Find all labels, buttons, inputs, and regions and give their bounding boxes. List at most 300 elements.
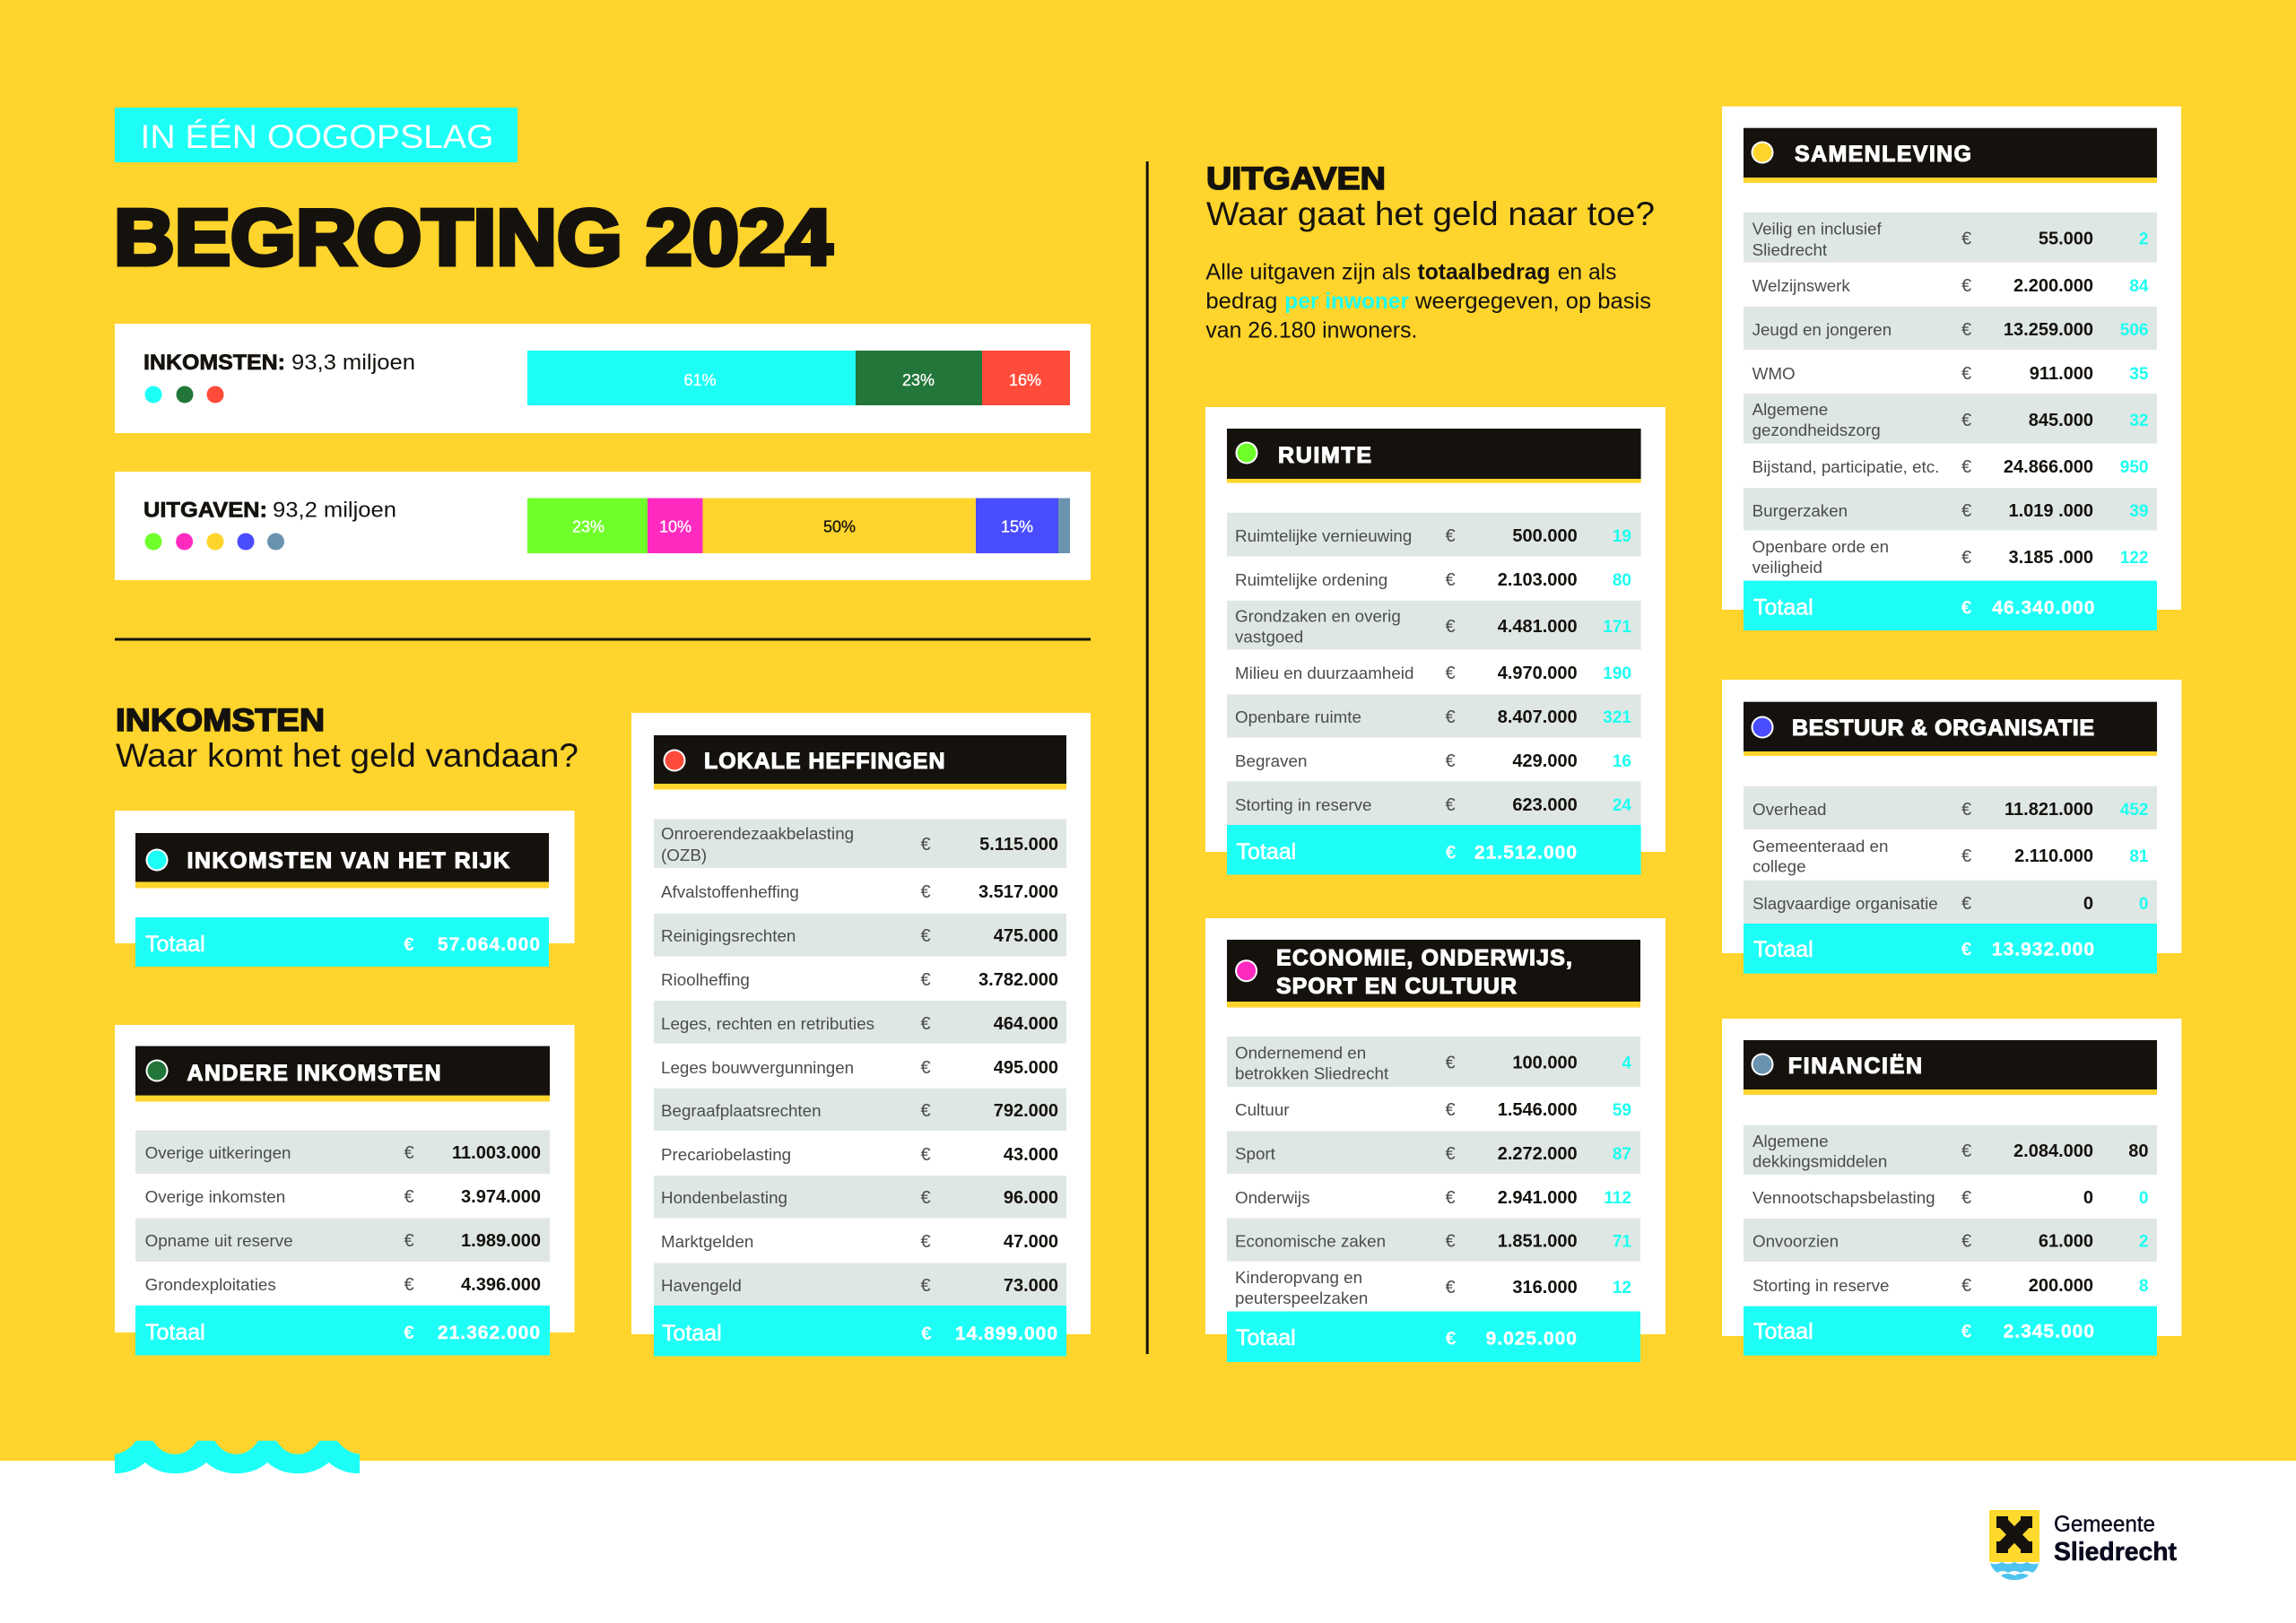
row: ondernemend: € [1445,1053,1456,1072]
row: openbare ruimte: € [1445,707,1456,727]
row: overhead: € [1961,800,1971,820]
row: overige inkomsten: € [404,1187,414,1207]
stacked bar: uitgaven: 50% [823,518,856,536]
stacked bar: inkomsten: 16% [1009,371,1041,389]
row: bijstand: 950 [2120,458,2149,477]
total row [135,1306,550,1356]
row: openbare ruimte: Openbare ruimte [1235,707,1361,726]
panel: financien [1722,1019,2181,1356]
row: onderwijs: 2.941.000 [1498,1188,1578,1208]
row: veilig en inclusief: 55.000 [2039,230,2093,249]
row: sport: Sport [1235,1144,1276,1163]
row: begraafplaatsrechten: Begraafplaatsrechten [661,1101,822,1120]
row: hondenbelasting: 96.000 [1004,1188,1058,1208]
row: onvoorzien: € [1961,1232,1971,1252]
row: vennootschapsbelasting: Vennootschapsbelasting [1752,1188,1935,1207]
row: jeugd en jongeren [1744,307,2157,350]
row: milieu: € [1445,664,1456,683]
row: veilig en inclusief [1744,213,2157,263]
row: economische zaken: Economische zaken [1235,1232,1386,1250]
row: ruimtelijke ordening: 80 [1613,571,1631,590]
row: kinderopvang: € [1445,1278,1456,1298]
total row: € [921,1324,932,1344]
row: slagvaardige organisatie [1744,881,2157,924]
row: welzijnswerk: € [1961,276,1971,296]
row: leges rechten: Leges, rechten en retributies [661,1014,874,1033]
row: rioolheffing: 3.782.000 [978,970,1058,990]
row: hondenbelasting: € [920,1188,931,1208]
total row: Totaal [1753,937,1813,962]
row: kinderopvang [1235,1268,1631,1307]
row: economische zaken: € [1445,1232,1456,1252]
row: gemeenteraad: 2.110.000 [2014,846,2093,866]
panel: samenleving [1722,107,2181,630]
total row: Totaal [1753,595,1813,621]
row: ozb [654,820,1066,868]
logo wordmark: Sliedrecht [2054,1538,2177,1567]
row: slagvaardige organisatie: 0 [2083,894,2093,914]
row: onderwijs [1235,1188,1631,1208]
total row: 9.025.000 [1486,1329,1578,1349]
stacked bar: uitgaven [527,499,1070,553]
row: ondernemend: Ondernemend en [1235,1044,1366,1062]
intro paragraph: per inwoner [1284,289,1409,314]
row: leges bouwvergunningen [661,1058,1058,1078]
row: marktgelden: 47.000 [1004,1232,1058,1252]
total row [1227,1311,1640,1362]
total row: € [1446,843,1457,864]
row: leges bouwvergunningen: 495.000 [994,1058,1058,1078]
row: wmo: 35 [2129,365,2149,384]
row: onvoorzien: 2 [2139,1233,2149,1252]
row: onderwijs: 112 [1604,1189,1631,1208]
total row [1227,825,1641,875]
row: algemene dekkingsmiddelen: € [1961,1141,1971,1161]
row: openbare orde [1752,537,2149,577]
row: precariobelasting: 43.000 [1004,1145,1058,1165]
row: milieu [1235,664,1631,683]
intro paragraph: van 26.180 inwoners. [1205,317,1417,343]
row: overige inkomsten: Overige inkomsten [145,1187,285,1206]
total row [1744,1306,2157,1356]
total row: Totaal [662,1321,722,1346]
total row: Totaal [1236,839,1296,864]
row: grondexploitaties: Grondexploitaties [145,1275,276,1294]
row: cultuur [1235,1100,1631,1120]
row: havengeld: € [920,1276,931,1296]
row: algemene dekkingsmiddelen: 80 [2128,1141,2149,1161]
row: leges rechten [654,1001,1066,1044]
row: storting in reserve: Storting in reserve [1235,795,1371,814]
row: veilig en inclusief: € [1961,230,1971,249]
row: bijstand: 24.866.000 [2004,457,2093,477]
row: slagvaardige organisatie: Slagvaardige organisatie [1752,894,1938,913]
row: openbare orde: veiligheid [1752,558,1822,577]
row: ozb: (OZB) [661,846,707,864]
row: sport [1227,1131,1640,1174]
row: cultuur: Cultuur [1235,1100,1290,1119]
row: algemene gezondheidszorg: Algemene [1752,400,1828,419]
row: reinigingsrechten: € [920,926,931,946]
row: veilig en inclusief: 2 [2139,230,2149,249]
row: vennootschapsbelasting [1752,1188,2149,1208]
intro paragraph: totaalbedrag [1417,260,1550,285]
row: openbare orde: 3.185 .000 [2008,548,2093,568]
total row: Totaal [1753,1319,1813,1344]
panel: uitgaven summary [115,472,1091,580]
total row [1744,924,2157,974]
row: economische zaken: 71 [1613,1232,1631,1252]
row: storting in reserve: 24 [1613,796,1631,815]
row: kinderopvang: 12 [1613,1279,1631,1298]
row: grondzaken: vastgoed [1235,628,1303,646]
row: algemene gezondheidszorg: 845.000 [2029,411,2093,430]
row: begraven [1235,751,1631,771]
row: veilig en inclusief: Veilig en inclusief [1752,219,1882,238]
row: openbare ruimte: 8.407.000 [1498,707,1578,727]
summary label: inkomsten [144,351,415,375]
row: onvoorzien [1744,1219,2157,1262]
row: overhead: 452 [2120,801,2149,820]
stacked bar: uitgaven: 15% [1001,518,1033,536]
row: burgerzaken: 1.019 .000 [2008,501,2093,521]
row: ozb: € [920,835,931,855]
row: leges rechten: 464.000 [994,1014,1058,1034]
total row: € [404,1323,414,1343]
row: cultuur: € [1445,1100,1456,1120]
row: jeugd en jongeren: 13.259.000 [2004,320,2093,340]
row: kinderopvang: peuterspeelzaken [1235,1289,1368,1307]
heading: inkomsten: INKOMSTEN [116,703,325,738]
row: begraafplaatsrechten: € [920,1101,931,1121]
row: ozb: 5.115.000 [979,835,1058,855]
header: inkomsten van het rijk [135,833,549,888]
row: hondenbelasting: Hondenbelasting [661,1188,787,1207]
row: storting in reserve [1752,1276,2149,1296]
row: veilig en inclusief: Sliedrecht [1752,240,1828,259]
row: grondzaken: € [1445,617,1456,637]
row: grondexploitaties [145,1275,541,1295]
row: opname uit reserve: € [404,1231,414,1251]
row: economische zaken [1227,1218,1640,1262]
row: gemeenteraad: college [1752,857,1806,875]
row: algemene gezondheidszorg [1744,394,2157,444]
row: bijstand: Bijstand, participatie, etc. [1752,457,1939,476]
row: ruimtelijke vernieuwing: 500.000 [1512,526,1578,546]
summary label: inkomsten: INKOMSTEN: [144,351,285,375]
panel: ruimte [1205,407,1665,875]
total row: € [1446,1329,1457,1349]
row: algemene gezondheidszorg: 32 [2129,412,2149,430]
row: ruimtelijke vernieuwing: € [1445,526,1456,546]
stacked bar: inkomsten [527,351,1070,405]
row: milieu: 190 [1603,664,1631,683]
row: ondernemend: betrokken Sliedrecht [1235,1063,1389,1083]
row: onvoorzien: 61.000 [2039,1232,2093,1252]
row: kinderopvang: 316.000 [1512,1278,1578,1298]
logo wordmark [2054,1512,2177,1567]
row: storting in reserve: € [1961,1276,1971,1296]
row: wmo: WMO [1752,364,1796,383]
row: ondernemend: 100.000 [1512,1053,1578,1072]
heading: inkomsten [116,703,578,774]
row: storting in reserve: 200.000 [2029,1276,2093,1296]
row: hondenbelasting [654,1176,1066,1218]
logo: gemeente sliedrecht [1989,1510,2177,1580]
row: storting in reserve: € [1445,795,1456,815]
row: burgerzaken: € [1961,501,1971,521]
header: financien [1744,1040,2157,1095]
row: grondzaken: 171 [1603,618,1631,637]
row: cultuur: 1.546.000 [1498,1100,1578,1120]
header: economie [1227,940,1640,1008]
row: algemene dekkingsmiddelen: Algemene [1752,1132,1829,1150]
row: precariobelasting: Precariobelasting [661,1145,791,1164]
row: reinigingsrechten [654,914,1066,957]
row: havengeld [654,1263,1066,1306]
row: afvalstoffenheffing [661,882,1058,902]
row: algemene gezondheidszorg: € [1961,411,1971,430]
row: bijstand: € [1961,457,1971,477]
header: lokale heffingen: LOKALE HEFFINGEN [704,749,945,774]
total row: € [404,934,414,955]
heading: uitgaven: UITGAVEN [1206,161,1386,196]
row: sport: € [1445,1144,1456,1164]
row: precariobelasting: € [920,1145,931,1165]
panel: bestuur en organisatie [1722,680,2181,974]
total row: 13.932.000 [1992,940,2095,960]
stacked bar: uitgaven: 23% [572,518,604,536]
total row: Totaal [145,932,205,957]
row: grondexploitaties: 4.396.000 [461,1275,541,1295]
row: rioolheffing: € [920,970,931,990]
row: algemene dekkingsmiddelen: dekkingsmiddelen [1752,1152,1887,1171]
total row [1744,581,2157,630]
total row: 14.899.000 [955,1324,1058,1344]
row: begraven: 429.000 [1512,751,1578,771]
row: marktgelden: Marktgelden [661,1232,753,1251]
row: ruimtelijke vernieuwing: 19 [1613,527,1631,546]
legend dots: uitgaven [145,533,284,551]
row: milieu: 4.970.000 [1498,664,1578,683]
logo wordmark: Gemeente [2054,1512,2155,1537]
row: gemeenteraad: Gemeenteraad en [1752,837,1888,855]
row: onderwijs: Onderwijs [1235,1188,1309,1207]
panel: andere inkomsten [115,1025,574,1356]
row: overige inkomsten: 3.974.000 [461,1187,541,1207]
total row: 46.340.000 [1992,597,2095,619]
row: ondernemend: 4 [1622,1055,1631,1072]
row: ruimtelijke ordening: € [1445,570,1456,590]
header: ruimte: RUIMTE [1278,443,1371,468]
row: opname uit reserve: 1.989.000 [461,1231,541,1251]
row: begraafplaatsrechten [654,1089,1066,1131]
header: samenleving [1744,128,2157,183]
row: gemeenteraad: € [1961,846,1971,866]
intro paragraph: Alle uitgaven zijn als [1205,260,1411,285]
row: ruimtelijke ordening: Ruimtelijke ordening [1235,570,1387,589]
total row: Totaal [1236,1325,1296,1350]
row: onvoorzien: Onvoorzien [1752,1232,1839,1251]
stacked bar: inkomsten: 61% [683,371,717,389]
row: afvalstoffenheffing: Afvalstoffenheffing [661,882,799,901]
row: welzijnswerk: 2.200.000 [2013,276,2093,296]
row: rioolheffing [661,970,1058,990]
row: vennootschapsbelasting: 0 [2083,1188,2093,1208]
panel: economie onderwijs sport en cultuur [1205,918,1665,1362]
stacked bar: uitgaven: 10% [659,518,691,536]
row: gemeenteraad [1752,837,2149,875]
row: opname uit reserve [135,1218,550,1262]
panel: inkomsten summary [115,324,1091,433]
row: begraafplaatsrechten: 792.000 [994,1101,1058,1121]
row: grondzaken: 4.481.000 [1498,617,1578,637]
legend dots: inkomsten [145,386,224,404]
icon: wave decoration [115,1441,360,1473]
row: rioolheffing: Rioolheffing [661,970,750,989]
intro paragraph: weergegeven, op basis [1414,289,1651,314]
header: andere inkomsten [135,1046,550,1101]
tag: in een oogopslag [115,108,517,162]
header: economie: SPORT EN CULTUUR [1276,974,1517,999]
row: milieu: Milieu en duurzaamheid [1235,664,1413,682]
total row: 57.064.000 [438,934,541,955]
tag: in een oogopslag: IN ÉÉN OOGOPSLAG [140,118,493,155]
row: cultuur: 59 [1613,1101,1631,1120]
icon: shield [1989,1510,2039,1580]
total row: 21.362.000 [438,1323,541,1343]
total row [654,1306,1066,1356]
row: ozb: Onroerendezaakbelasting [661,824,854,843]
panel: inkomsten van het rijk [115,811,574,967]
row: overige uitkeringen: 11.003.000 [452,1143,541,1163]
row: ruimtelijke vernieuwing: Ruimtelijke vernieuwing [1235,526,1412,545]
row: sport: 2.272.000 [1498,1144,1578,1164]
intro paragraph: bedrag [1205,289,1277,314]
total row [135,917,549,967]
header: bestuur: BESTUUR & ORGANISATIE [1792,716,2094,741]
summary label: inkomsten: 93,3 miljoen [291,351,415,375]
intro paragraph [1205,260,1651,343]
row: marktgelden [661,1232,1058,1252]
row: reinigingsrechten: Reinigingsrechten [661,926,796,945]
header: ruimte [1227,429,1641,483]
row: kinderopvang: Kinderopvang en [1235,1268,1362,1287]
heading: uitgaven: Waar gaat het geld naar toe? [1206,195,1655,232]
row: overhead: Overhead [1752,800,1826,819]
total row: € [1961,940,1972,960]
row: algemene gezondheidszorg: gezondheidszorg [1752,421,1881,439]
heading: uitgaven [1206,161,1655,232]
row: burgerzaken: 39 [2129,502,2149,521]
row: sport: 87 [1613,1145,1631,1164]
row: afvalstoffenheffing: 3.517.000 [978,882,1058,902]
row: onderwijs: € [1445,1188,1456,1208]
row: burgerzaken [1744,488,2157,531]
row: vennootschapsbelasting: € [1961,1188,1971,1208]
row: ruimtelijke ordening [1235,570,1631,590]
summary label: uitgaven: UITGAVEN: [144,499,267,522]
row: storting in reserve [1227,781,1641,825]
row: slagvaardige organisatie: 0 [2139,895,2149,914]
stacked bar: inkomsten: 23% [902,371,935,389]
row: grondexploitaties: € [404,1275,414,1295]
row: openbare ruimte [1227,694,1641,738]
row: ondernemend [1227,1037,1640,1087]
row: marktgelden: € [920,1232,931,1252]
row: economische zaken: 1.851.000 [1498,1232,1578,1252]
row: leges bouwvergunningen: Leges bouwvergunningen [661,1058,854,1077]
row: wmo: € [1961,364,1971,384]
row: vennootschapsbelasting: 0 [2139,1189,2149,1208]
row: openbare orde: € [1961,548,1971,568]
row: jeugd en jongeren: € [1961,320,1971,340]
heading: inkomsten: Waar komt het geld vandaan? [116,737,578,774]
row: leges bouwvergunningen: € [920,1058,931,1078]
row: overige uitkeringen: Overige uitkeringen [145,1143,291,1162]
row: precariobelasting [661,1145,1058,1165]
panel: lokale heffingen [631,713,1091,1356]
row: storting in reserve: 8 [2139,1277,2149,1296]
row: slagvaardige organisatie: € [1961,894,1971,914]
total row: € [1961,597,1972,619]
row: ruimtelijke vernieuwing [1227,513,1641,556]
header: andere inkomsten: ANDERE INKOMSTEN [187,1061,441,1086]
row: overige inkomsten [145,1187,541,1207]
intro paragraph: en als [1558,260,1616,285]
total row: 2.345.000 [2004,1322,2095,1342]
row: jeugd en jongeren: 506 [2120,321,2149,340]
row: wmo: 911.000 [2030,364,2093,384]
header: samenleving: SAMENLEVING [1795,142,1971,167]
row: welzijnswerk: 84 [2129,277,2149,296]
header: lokale heffingen [654,735,1066,789]
header: inkomsten van het rijk: INKOMSTEN VAN HET RIJK [187,848,509,873]
total row: € [1961,1322,1972,1342]
row: ruimtelijke ordening: 2.103.000 [1498,570,1578,590]
row: welzijnswerk: Welzijnswerk [1752,276,1850,295]
row: havengeld: 73.000 [1004,1276,1058,1296]
row: begraven: 16 [1613,752,1631,771]
row: storting in reserve: Storting in reserve [1752,1276,1889,1295]
header: economie: ECONOMIE, ONDERWIJS, [1276,945,1572,970]
summary label: uitgaven [144,499,396,522]
total row: 21.512.000 [1474,843,1578,864]
row: bijstand [1752,457,2149,477]
row: grondzaken: Grondzaken en overig [1235,606,1401,626]
row: algemene dekkingsmiddelen [1744,1125,2157,1175]
row: overhead [1744,786,2157,829]
row: gemeenteraad: 81 [2129,847,2149,866]
row: jeugd en jongeren: Jeugd en jongeren [1752,320,1892,339]
row: havengeld: Havengeld [661,1276,742,1295]
row: wmo [1752,364,2149,384]
row: openbare orde: 122 [2120,549,2149,568]
row: leges rechten: € [920,1014,931,1034]
total row: Totaal [145,1320,205,1345]
row: algemene dekkingsmiddelen: 2.084.000 [2013,1141,2093,1161]
row: overige uitkeringen: € [404,1143,414,1163]
row: begraven: € [1445,751,1456,771]
row: storting in reserve: 623.000 [1512,795,1578,815]
row: grondzaken [1227,601,1641,649]
row: opname uit reserve: Opname uit reserve [145,1231,293,1250]
row: openbare ruimte: 321 [1603,708,1631,727]
row: overige uitkeringen [135,1130,550,1174]
header: financien: FINANCIËN [1788,1054,1922,1079]
row: begraven: Begraven [1235,751,1307,770]
summary label: uitgaven: 93,2 miljoen [273,499,396,522]
